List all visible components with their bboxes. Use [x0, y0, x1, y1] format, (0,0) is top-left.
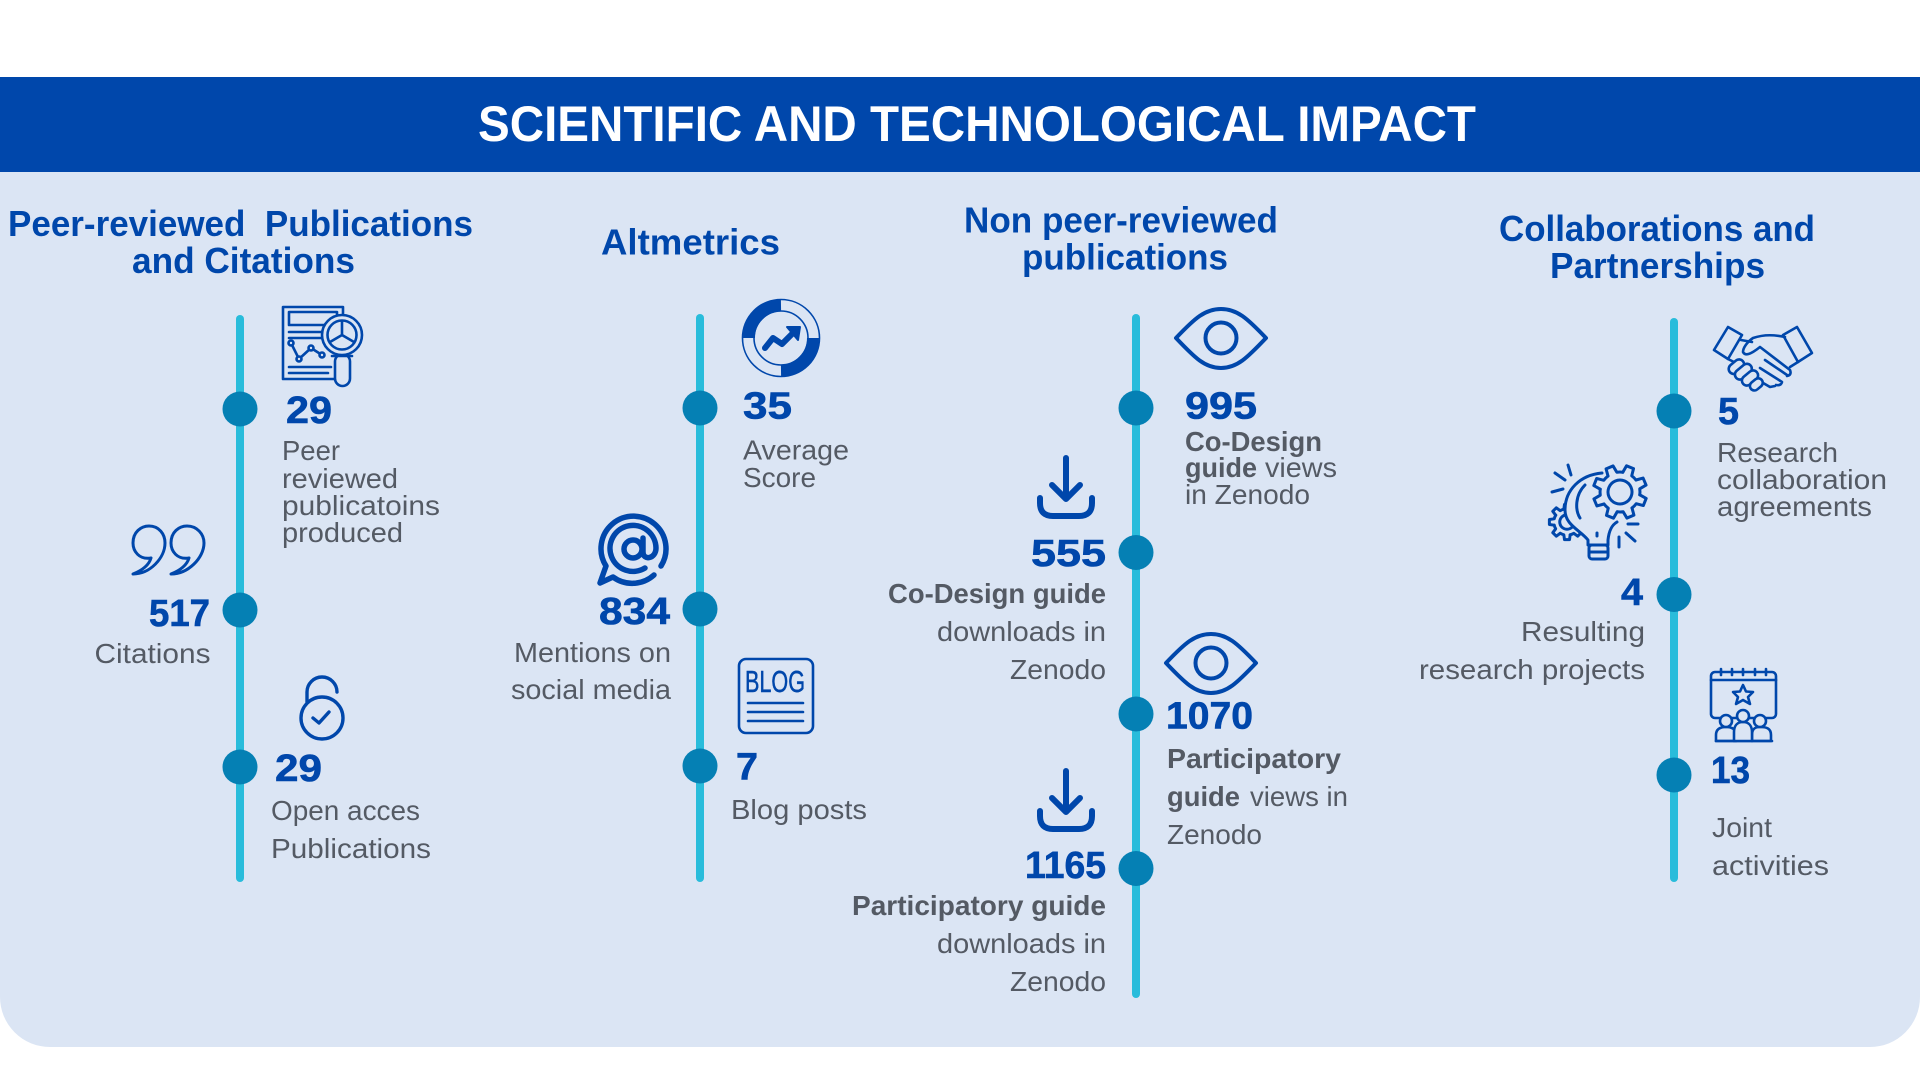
stat: 995 co-design views: in Zenodo — [1185, 479, 1310, 510]
heading: non peer-reviewed publications: publications — [1022, 236, 1228, 278]
stat: 13 joint activities: Joint — [1712, 812, 1772, 843]
stat: 35 average score: 35 — [743, 386, 792, 428]
heading: non peer-reviewed publications: Non peer-reviewed — [964, 200, 1278, 240]
icon: eye — [1166, 634, 1256, 693]
stat: 5 research agreements: 5 — [1718, 391, 1739, 433]
stat: 4 resulting projects: research projects — [1419, 654, 1645, 685]
stat: 29 peer reviewed publications: 29 — [286, 390, 332, 432]
stat: 13 joint activities — [1711, 750, 1829, 881]
stat: 555 co-design downloads: Zenodo — [1010, 654, 1106, 685]
panel: peer-reviewed publications and citations — [8, 203, 473, 882]
stat: 1165 participatory downloads: downloads in — [937, 928, 1106, 959]
stat: 1070 participatory views — [1166, 696, 1348, 850]
stat: 4 resulting projects: Resulting — [1521, 616, 1645, 647]
stat: 555 co-design downloads: downloads in — [937, 616, 1106, 647]
stat: 1165 participatory downloads: Zenodo — [1010, 966, 1106, 997]
icon: score gauge — [742, 300, 820, 376]
stat: 29 peer reviewed publications: produced — [282, 517, 403, 548]
icon: light bulb with gears — [1549, 457, 1655, 559]
stat: 555 co-design downloads — [888, 533, 1106, 685]
stat: 29 peer reviewed publications — [282, 390, 440, 548]
icon: report with magnifier — [283, 307, 362, 386]
stat: 5 research agreements — [1717, 391, 1887, 522]
stat: 29 open access publications: Open acces — [271, 795, 420, 826]
stat: 13 joint activities: activities — [1712, 850, 1829, 881]
icon: blog page: BLOG — [745, 664, 805, 699]
icon: handshake — [1714, 327, 1812, 392]
stat: 7 blog posts: Blog posts — [731, 794, 867, 825]
stat: 29 peer reviewed publications: publicatoins — [282, 490, 440, 521]
stat: 35 average score — [743, 386, 849, 493]
icon: quotation marks — [133, 526, 204, 574]
timeline 4 — [1656, 318, 1692, 882]
stat: 555 co-design downloads: 555 — [1031, 533, 1106, 575]
stat: 29 peer reviewed publications: reviewed — [282, 463, 398, 494]
stat: 4 resulting projects — [1419, 572, 1645, 685]
stat: 35 average score: Score — [743, 462, 816, 493]
stat: 29 peer reviewed publications: Peer — [282, 435, 340, 466]
timeline 3 — [1118, 314, 1154, 998]
stat: 5 research agreements: agreements — [1717, 491, 1872, 522]
stat: 1070 participatory views: Zenodo — [1167, 819, 1262, 850]
stat: 995 co-design views: 995 — [1185, 386, 1257, 428]
heading: collaborations and partnerships: Partnerships — [1550, 245, 1765, 286]
icon: download — [1040, 458, 1092, 516]
icon: blog page — [739, 659, 813, 733]
stat: 5 research agreements: collaboration — [1717, 464, 1887, 495]
panel: non peer-reviewed publications — [852, 200, 1348, 998]
stat: 834 mentions — [511, 591, 671, 705]
stat: 1165 participatory downloads — [852, 845, 1106, 997]
stat: 29 open access publications: Publications — [271, 833, 431, 864]
stat: 555 co-design downloads: Co-Design guide — [888, 578, 1106, 609]
stat: 834 mentions: Mentions on — [514, 637, 671, 668]
icon: eye — [1176, 309, 1266, 368]
icon: calendar with people — [1711, 669, 1776, 741]
timeline 2 — [682, 314, 718, 882]
heading: peer-reviewed publications — [8, 203, 473, 281]
stat: 517 citations: 517 — [149, 593, 210, 635]
stat: 7 blog posts: 7 — [736, 746, 758, 788]
stat: 13 joint activities: 13 — [1711, 750, 1750, 792]
title banner — [0, 77, 1920, 172]
heading: altmetrics: Altmetrics — [601, 222, 780, 262]
stat: 29 open access publications — [271, 748, 431, 864]
stat: 1165 participatory downloads: 1165 — [1025, 845, 1106, 887]
heading: collaborations and partnerships — [1499, 208, 1815, 286]
stat: 4 resulting projects: 4 — [1621, 572, 1643, 614]
stat: 35 average score: Average — [743, 434, 849, 466]
stat: 995 co-design views: Co-Design — [1185, 426, 1322, 457]
stat: 5 research agreements: Research — [1717, 437, 1838, 468]
stat: 517 citations: Citations — [94, 638, 210, 669]
heading: peer-reviewed publications: Peer-reviewed Publications — [8, 203, 473, 244]
stat: 1165 participatory downloads: Participatory guide — [852, 890, 1106, 921]
stat: 29 open access publications: 29 — [275, 748, 322, 790]
panel: collaborations and partnerships — [1419, 208, 1887, 882]
icon: open padlock — [301, 677, 343, 739]
timeline 1 — [222, 315, 258, 882]
stat: 995 co-design views: guide — [1185, 452, 1257, 483]
stat: 1070 participatory views: 1070 — [1166, 696, 1253, 738]
icon: at sign speech bubble — [600, 516, 666, 583]
title banner: SCIENTIFIC AND TECHNOLOGICAL IMPACT — [478, 96, 1476, 152]
heading: non peer-reviewed publications — [964, 200, 1278, 278]
icon: download — [1040, 771, 1092, 829]
stat: 1070 participatory views: guide — [1167, 781, 1240, 812]
stat: 834 mentions: 834 — [599, 591, 670, 633]
stat: 7 blog posts — [731, 746, 867, 825]
heading: peer-reviewed publications: and Citations — [132, 240, 355, 281]
stat: 1070 participatory views: Participatory — [1167, 743, 1341, 774]
stat: 1070 participatory views: views in — [1250, 781, 1348, 812]
stat: 517 citations — [94, 593, 210, 669]
heading: collaborations and partnerships: Collaborations and — [1499, 208, 1815, 249]
stat: 995 co-design views — [1185, 386, 1337, 510]
stat: 834 mentions: social media — [511, 674, 671, 705]
panel: altmetrics — [511, 222, 867, 882]
stat: 995 co-design views: views — [1265, 452, 1337, 483]
